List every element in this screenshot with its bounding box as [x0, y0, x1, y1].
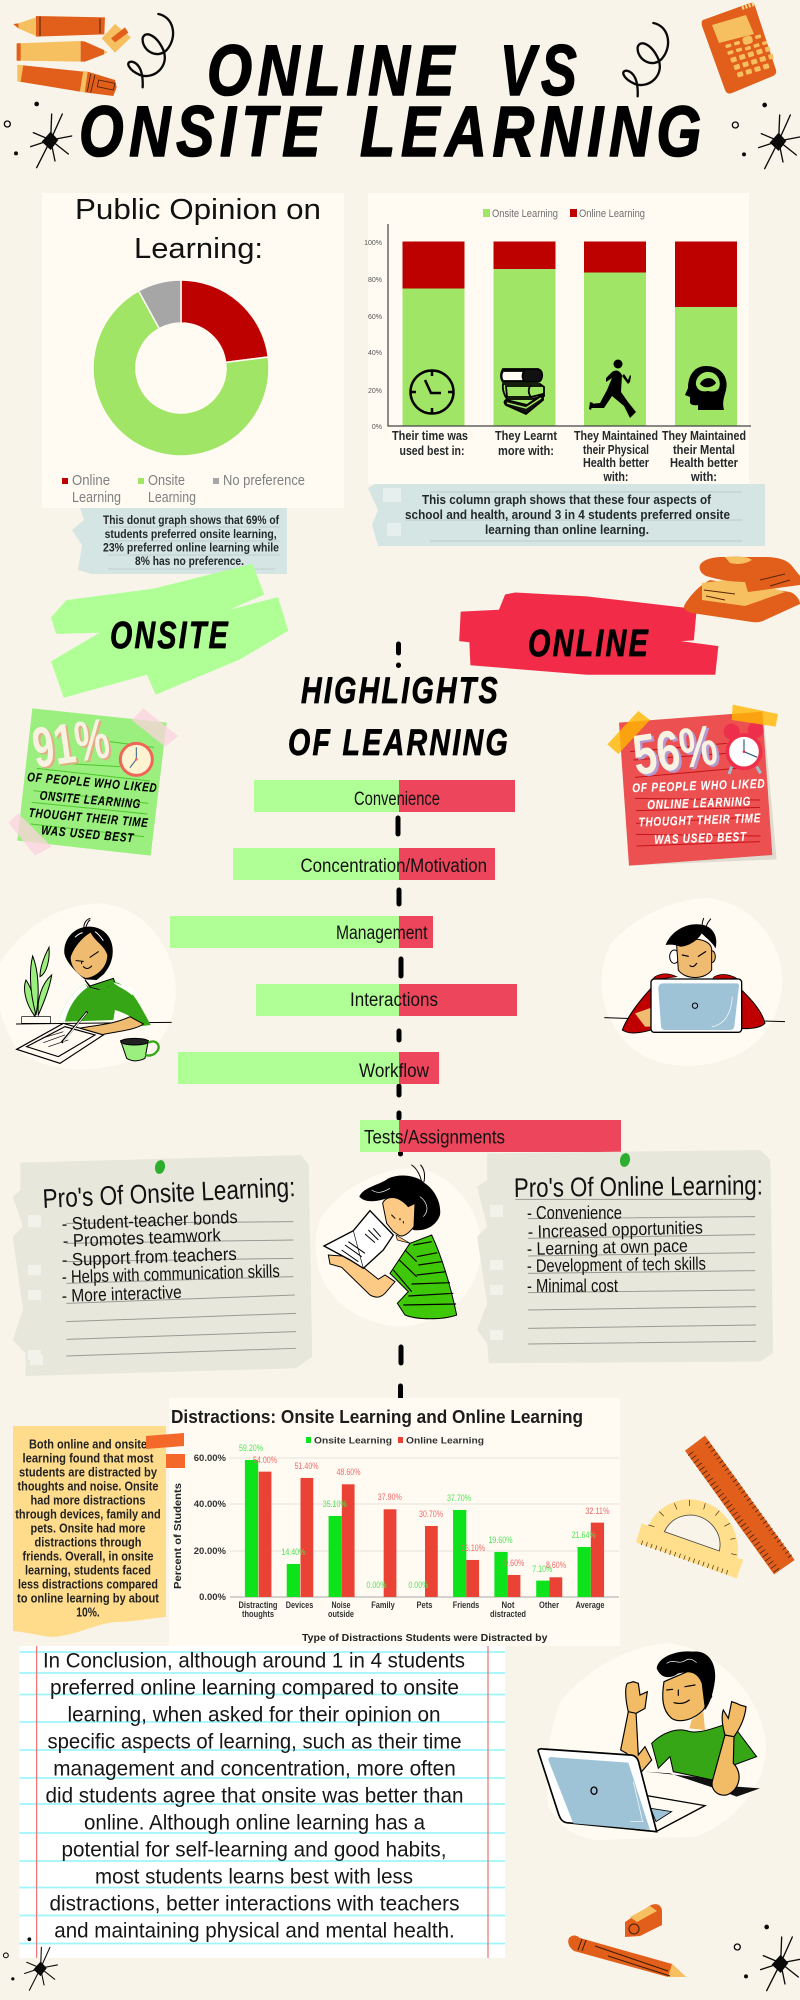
icon: runner — [589, 360, 636, 418]
data labels: onsite — [239, 1443, 596, 1590]
data labels: online: 8.60% — [546, 1560, 566, 1570]
data labels: online — [253, 1455, 609, 1570]
callout: distractions note: to online learning by about — [17, 1592, 160, 1606]
laptop — [643, 1795, 705, 1832]
icon: squiggle left — [128, 14, 173, 87]
bar: tests — [360, 1120, 621, 1152]
donut legend: No preference — [223, 472, 305, 489]
plant — [22, 947, 52, 1023]
data labels: onsite: 0.00% — [366, 1580, 386, 1590]
text: conclusion: management and concentration, more often — [53, 1758, 456, 1780]
text: conclusion: learning, when asked for their opinion on — [68, 1704, 440, 1726]
callout: distractions note: thoughts and noise. Onsite — [18, 1480, 159, 1494]
column chart category labels: Health better — [670, 456, 738, 470]
icon: splat bottom right — [734, 1925, 800, 1991]
text: onsite stat caption: THOUGHT THEIR TIME — [28, 806, 149, 830]
y axis labels: 20.00% — [194, 1546, 227, 1557]
donut legend: Onsite — [148, 472, 185, 489]
bar: workflow — [178, 1052, 439, 1084]
panel: pros of onsite learning — [13, 1155, 312, 1376]
column chart category labels: with: — [690, 470, 717, 484]
chart title: Distractions: Onsite Learning and Online Learning — [171, 1407, 583, 1427]
stacked bar: learnt more — [494, 242, 556, 426]
callout: distractions note: learning, students faced — [25, 1564, 151, 1578]
column chart tick labels: 20% — [368, 388, 382, 395]
icon: ruler — [685, 1436, 795, 1574]
donut legend: Learning — [72, 489, 121, 506]
callout: distractions note: learning found that most — [22, 1452, 154, 1466]
chart legend: Onsite Learning — [314, 1436, 392, 1446]
arms — [621, 1712, 652, 1772]
category labels — [238, 1600, 604, 1620]
bar: management — [170, 916, 433, 948]
bar: convenience — [254, 780, 515, 812]
category labels: Average — [576, 1600, 604, 1611]
category labels: Not — [502, 1600, 515, 1611]
callout: distractions note: through devices, family and — [15, 1508, 161, 1522]
column chart legend: Online Learning — [579, 208, 645, 220]
pin — [619, 1152, 631, 1168]
brush: onsite label — [51, 564, 288, 698]
data labels: onsite: 21.64% — [572, 1530, 596, 1540]
data labels: online: 16.10% — [461, 1543, 485, 1553]
icon: protractor — [636, 1499, 743, 1578]
data labels: online: 30.70% — [419, 1509, 443, 1519]
bar: convenience: Convenience — [354, 789, 440, 810]
list: pros onsite: - More interactive — [61, 1282, 182, 1306]
text: conclusion: In Conclusion, although around 1 in 4 students — [43, 1650, 465, 1672]
y axis labels: 60.00% — [194, 1453, 227, 1464]
title — [79, 32, 707, 172]
x axis title: Type of Distractions Students were Distracted by — [302, 1633, 548, 1644]
icon: books — [501, 369, 544, 414]
illustration: boy with laptop — [601, 898, 785, 1066]
list: pros online: - Learning at own pace — [527, 1236, 688, 1259]
text: conclusion: preferred online learning compared to onsite — [50, 1676, 459, 1700]
callout: column caption — [368, 484, 765, 546]
data labels: online: 32.11% — [585, 1506, 609, 1516]
category labels: Distracting — [238, 1600, 278, 1611]
y axis labels — [194, 1453, 227, 1603]
category labels: Other — [539, 1600, 559, 1611]
donut legend: Online — [72, 472, 110, 489]
bar: tests: Tests/Assignments — [364, 1128, 505, 1148]
text: conclusion: online. Although online learning has a — [84, 1812, 425, 1834]
panel: column chart — [364, 193, 751, 484]
data labels: online: 48.60% — [336, 1467, 360, 1477]
callout: distractions note: distractions through — [34, 1536, 142, 1550]
column chart category labels: their Physical — [583, 443, 649, 457]
bar: concentration — [233, 848, 495, 880]
text: conclusion: specific aspects of learning, such as their time — [48, 1730, 462, 1754]
callout: column caption: school and health, around 3 in 4 students preferred onsite — [405, 507, 730, 522]
callout: distractions note — [13, 1426, 185, 1637]
data labels: onsite: 7.10% — [532, 1564, 552, 1574]
data labels: onsite: 59.20% — [239, 1443, 263, 1453]
note: 91 percent onsite — [8, 707, 178, 856]
panel: distractions chart — [169, 1398, 620, 1646]
text: online stat caption: THOUGHT THEIR TIME — [638, 811, 761, 829]
icon: dashed center line — [398, 644, 401, 1404]
column chart tick labels: 100% — [364, 240, 382, 247]
list: pros online: - Development of tech skills — [527, 1254, 706, 1276]
column chart tick labels: 60% — [368, 314, 382, 321]
bar: interactions: Interactions — [350, 990, 438, 1011]
heading: highlights of learning: OF LEARNING — [288, 722, 510, 763]
text: online stat caption: OF PEOPLE WHO LIKED — [632, 777, 766, 795]
text: conclusion: most students learns best with less — [95, 1866, 413, 1888]
text: conclusion: did students agree that onsite was better than — [46, 1784, 464, 1808]
data labels: onsite: 35.10% — [323, 1499, 347, 1509]
heading: highlights of learning — [288, 670, 510, 763]
column chart legend — [483, 208, 645, 220]
list: pros online: - Minimal cost — [527, 1276, 618, 1296]
mug — [121, 1038, 159, 1061]
icon: sharpener — [625, 1904, 662, 1937]
callout: distractions note: less distractions compared — [18, 1578, 158, 1592]
list: pros online — [527, 1203, 706, 1296]
column chart category labels: with: — [603, 470, 628, 484]
stat: 91% — [28, 707, 115, 782]
column chart category labels: Their time was — [392, 429, 468, 443]
brush: online label — [459, 593, 718, 675]
title: ONLINE — [207, 32, 460, 111]
y axis labels: 0.00% — [199, 1592, 227, 1603]
column chart category labels: They Maintained — [574, 429, 658, 443]
title: ONSITE — [79, 93, 326, 172]
pin — [154, 1159, 166, 1175]
y axis title: Percent of Students — [173, 1483, 184, 1589]
icon: calculator — [702, 3, 776, 94]
icon: clock — [410, 370, 454, 414]
category labels: Friends — [453, 1600, 479, 1611]
stacked bar: physical health — [584, 242, 646, 426]
category labels: Devices — [286, 1600, 313, 1611]
callout: distractions note: friends. Overall, in onsite — [22, 1550, 154, 1564]
list: pros onsite — [61, 1207, 280, 1306]
laptop — [651, 979, 742, 1032]
donut legend — [62, 472, 305, 506]
list: pros onsite: - Promotes teamwork — [62, 1225, 222, 1251]
data labels: onsite: 14.40% — [281, 1547, 305, 1557]
text: conclusion: distractions, better interactions with teachers — [50, 1892, 460, 1916]
y axis labels: 40.00% — [194, 1499, 227, 1510]
callout: distractions note: students are distracted by — [19, 1466, 157, 1480]
donut chart — [93, 280, 269, 456]
list: pros onsite: - Student-teacher bonds — [61, 1207, 238, 1234]
brush: online label: ONLINE — [528, 623, 650, 665]
callout: donut caption: students preferred onsite learning, — [105, 529, 277, 541]
column chart legend: Onsite Learning — [492, 208, 558, 220]
tablet — [17, 1023, 103, 1063]
icon: splat top right — [732, 103, 800, 169]
icon: head with brain — [685, 366, 727, 410]
icon: squiggle right — [623, 23, 668, 96]
icon: splat top left — [4, 102, 72, 168]
data labels: onsite: 37.70% — [447, 1493, 471, 1503]
text: conclusion: potential for self-learning and good habits, — [62, 1838, 446, 1862]
stat: 56%: 56% — [629, 714, 721, 788]
chart bars — [245, 1460, 604, 1597]
book — [324, 1211, 393, 1268]
column chart tick labels — [364, 240, 382, 431]
icon: clock — [120, 743, 152, 775]
heading: pros onsite: Pro's Of Onsite Learning: — [42, 1172, 296, 1214]
column chart category labels: used best in: — [400, 444, 464, 458]
text: onsite stat caption: WAS USED BEST — [41, 823, 135, 845]
category labels: Family — [371, 1600, 395, 1611]
column chart category labels: They Learnt — [495, 429, 558, 443]
stacked bar: time used best — [402, 242, 464, 426]
list: pros onsite: - Support from teachers — [61, 1244, 237, 1270]
column chart tick labels: 80% — [368, 277, 382, 284]
callout: distractions note: Both online and onsite — [29, 1438, 147, 1452]
shirt — [390, 1235, 457, 1319]
chart legend — [306, 1436, 484, 1446]
callout: donut caption: 23% preferred online learning while — [103, 542, 279, 554]
data labels: online: 9.60% — [504, 1558, 524, 1568]
icon: pencil — [568, 1936, 686, 1977]
column chart tick labels: 40% — [368, 350, 382, 357]
bar: workflow: Workflow — [359, 1061, 429, 1082]
text: conclusion: and maintaining physical and mental health. — [54, 1920, 455, 1942]
list: pros onsite: - Helps with communication skills — [62, 1261, 280, 1287]
text: onsite stat caption — [27, 770, 158, 845]
bar: interactions — [256, 984, 517, 1016]
column chart category labels: more with: — [498, 444, 554, 458]
list: pros online: - Increased opportunities — [528, 1217, 703, 1242]
tape — [146, 1433, 185, 1468]
column chart category labels — [392, 429, 746, 484]
list: pros online: - Convenience — [527, 1203, 622, 1223]
heading: public opinion: Public Opinion on — [75, 194, 321, 226]
stat: 56%: 56% — [632, 716, 724, 790]
data labels: online: 51.40% — [295, 1461, 319, 1471]
category labels: Pets — [416, 1600, 432, 1611]
stat: 91%: 91% — [28, 707, 113, 780]
callout: donut caption: This donut graph shows that 69% of — [103, 515, 279, 527]
heading: public opinion: Learning: — [134, 233, 263, 265]
callout: distractions note: pets. Onsite had more — [30, 1522, 146, 1536]
category labels: Noise — [332, 1600, 350, 1611]
panel: pros of online learning — [477, 1150, 773, 1363]
column chart tick labels: 0% — [372, 424, 382, 431]
brush: onsite label: ONSITE — [110, 615, 230, 657]
data labels: onsite: 19.60% — [488, 1535, 512, 1545]
icon: highlighter markers — [13, 16, 131, 96]
column chart category labels: Health better — [583, 456, 649, 470]
category labels: thoughts — [242, 1609, 274, 1620]
callout: distractions note: had more distractions — [30, 1494, 146, 1508]
head — [663, 1663, 712, 1721]
callout: donut caption — [72, 508, 287, 574]
arm — [328, 1255, 395, 1297]
note: 56 percent online — [607, 705, 778, 866]
text: online stat caption — [632, 777, 766, 847]
text: onsite stat caption: OF PEOPLE WHO LIKED — [27, 770, 158, 795]
text: onsite stat caption: ONSITE LEARNING — [39, 789, 142, 811]
callout: donut caption: 8% has no preference. — [135, 556, 244, 568]
sleeves — [622, 982, 657, 1033]
panel: conclusion — [20, 1646, 505, 1958]
column chart category labels: their Mental — [673, 443, 735, 457]
icon: alarm clock — [724, 722, 764, 774]
category labels: distracted — [490, 1609, 526, 1620]
hair — [359, 1176, 440, 1230]
text: online stat caption: WAS USED BEST — [654, 830, 747, 847]
data labels: online: 54.00% — [253, 1455, 277, 1465]
callout: column caption: learning than online learning. — [485, 522, 649, 537]
icon: splat bottom left — [3, 1937, 57, 1990]
illustration: girl writing — [0, 903, 176, 1069]
chart legend: Online Learning — [406, 1436, 484, 1446]
icon: stacked books — [684, 556, 800, 622]
data labels: online: 37.90% — [378, 1492, 402, 1502]
heading: highlights of learning: HIGHLIGHTS — [301, 670, 500, 711]
panel: public opinion donut — [42, 193, 344, 508]
stacked bar: mental health — [675, 242, 737, 426]
data labels: onsite: 0.00% — [408, 1580, 428, 1590]
heading: public opinion — [75, 194, 321, 265]
callout: distractions note: 10%. — [76, 1606, 100, 1620]
stat: 91%: 91% — [31, 709, 115, 782]
text: online stat caption: ONLINE LEARNING — [647, 795, 751, 812]
category labels: outside — [328, 1609, 354, 1620]
title: VS — [500, 32, 582, 111]
shirt — [652, 1725, 757, 1780]
title: LEARNING — [360, 93, 707, 172]
bar: management: Management — [336, 923, 428, 944]
donut legend: Learning — [148, 489, 196, 506]
callout: column caption: This column graph shows that these four aspects of — [422, 492, 712, 507]
illustration: boy waving with laptop — [538, 1643, 766, 1840]
illustration: reader — [316, 1165, 482, 1327]
text: conclusion — [43, 1650, 465, 1942]
bar: concentration: Concentration/Motivation — [300, 856, 487, 877]
column chart category labels: They Maintained — [662, 429, 746, 443]
